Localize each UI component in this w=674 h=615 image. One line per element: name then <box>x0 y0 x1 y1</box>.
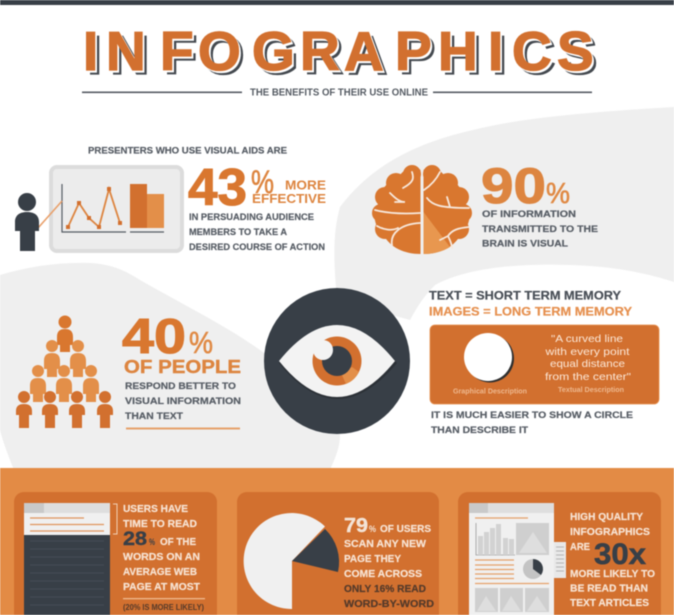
text: 28%: % <box>149 537 155 547</box>
panel: 30x infographics <box>458 492 661 615</box>
title: INFOGRAPHICS <box>83 20 594 82</box>
circle example card: "A curved line <box>551 333 623 345</box>
stat: 43%: 43 <box>188 159 247 217</box>
text: 30x: INFOGRAPHICS <box>570 527 650 538</box>
panel: 43% more effective: MORE <box>285 178 326 192</box>
text: 79%: 79 <box>344 515 368 537</box>
text: 30x: BE READ THAN <box>570 584 648 594</box>
text: 30x: TEXT ARTICLES <box>570 598 649 609</box>
text: 79%: SCAN ANY NEW <box>344 539 427 550</box>
top bar <box>0 0 674 5</box>
text: 28% <box>123 504 205 612</box>
panel: 90% brain <box>372 158 599 254</box>
text: 30x: HIGH QUALITY <box>570 512 643 523</box>
heading: PRESENTERS WHO USE VISUAL AIDS ARE <box>88 146 288 156</box>
description: OF INFORMATION <box>482 209 576 220</box>
icon: web page <box>24 503 117 615</box>
title: INFOGRAPHICS <box>85 22 595 84</box>
text: 28%: USERS HAVE <box>123 504 188 515</box>
circle example card: from the center" <box>545 371 631 383</box>
panel: 90% brain: % <box>546 178 570 210</box>
text: 28%: AVERAGE WEB <box>123 567 197 578</box>
panel: memory comparison: IMAGES = LONG TERM MEMORY <box>429 306 632 318</box>
panel: 40% of people: OF PEOPLE <box>124 357 241 377</box>
description: MEMBERS TO TAKE A <box>189 227 287 238</box>
panel: memory comparison <box>429 290 659 436</box>
title: INFOGRAPHICS <box>87 24 598 86</box>
description <box>125 381 241 422</box>
text: 28%: (20% IS MORE LIKELY) <box>123 603 204 612</box>
icon: brain <box>372 165 472 254</box>
text: 28%: TIME TO READ <box>123 519 197 530</box>
chart: pie <box>244 513 339 609</box>
icon: pyramid of people <box>16 316 113 428</box>
background blob: right <box>334 107 674 320</box>
text: 30x: ARE <box>570 542 590 553</box>
description: THAN TEXT <box>125 411 183 422</box>
text: 28%: 28 <box>123 529 147 550</box>
panel: 40% of people <box>16 310 241 430</box>
caption: THAN DESCRIBE IT <box>431 425 528 436</box>
text: 28%: WORDS ON AN <box>123 552 200 563</box>
panel: 43% more effective: EFFECTIVE <box>252 191 326 206</box>
panel: 40% of people: % <box>189 325 213 360</box>
text: 30x: MORE LIKELY TO <box>570 569 655 580</box>
text: 79%: OF USERS <box>380 524 431 535</box>
panel: 43% more effective: % <box>251 164 274 200</box>
background blob: left <box>0 263 340 470</box>
text: 28%: OF THE <box>160 537 196 548</box>
panel: 28% of words <box>14 492 217 615</box>
text: 79% <box>344 515 434 610</box>
circle example card: equal distance <box>550 358 625 370</box>
description <box>482 209 599 250</box>
circle example card: Textual Description <box>558 387 624 394</box>
description: RESPOND BETTER TO <box>125 381 237 392</box>
description: VISUAL INFORMATION <box>125 396 241 407</box>
caption: IT IS MUCH EASIER TO SHOW A CIRCLE <box>431 410 634 421</box>
description: IN PERSUADING AUDIENCE <box>189 212 315 223</box>
bottom band <box>0 468 674 615</box>
stat: 90%: 90 <box>481 158 546 214</box>
circle example card: with every point <box>544 346 630 358</box>
subtitle with rules: THE BENEFITS OF THEIR USE ONLINE <box>250 88 428 98</box>
text: 28%: PAGE AT MOST <box>123 582 200 593</box>
stat: 40%: 40 <box>122 310 186 364</box>
text: 30x <box>570 512 655 609</box>
panel: 79% scan <box>237 492 439 615</box>
text: 30x: 30x <box>594 538 646 571</box>
description: TRANSMITTED TO THE <box>482 224 599 235</box>
circle example card: Graphical Description <box>453 388 527 396</box>
caption <box>431 410 634 436</box>
text: 79%: WORD-BY-WORD <box>344 599 434 610</box>
text: 79%: PAGE THEY <box>344 554 401 565</box>
panel: 43% more effective <box>15 146 326 253</box>
icon: presenter with board <box>15 167 182 251</box>
description: DESIRED COURSE OF ACTION <box>189 242 325 253</box>
description <box>189 212 325 253</box>
text: 79%: COME ACROSS <box>344 569 422 580</box>
text: 79%: % <box>369 524 376 534</box>
text: 79%: ONLY 16% READ <box>344 584 426 595</box>
icon: eye <box>264 288 410 434</box>
heading: TEXT = SHORT TERM MEMORY <box>429 290 621 302</box>
description: BRAIN IS VISUAL <box>482 238 568 250</box>
circle example card <box>430 325 659 404</box>
icon: infographic page <box>469 503 566 615</box>
